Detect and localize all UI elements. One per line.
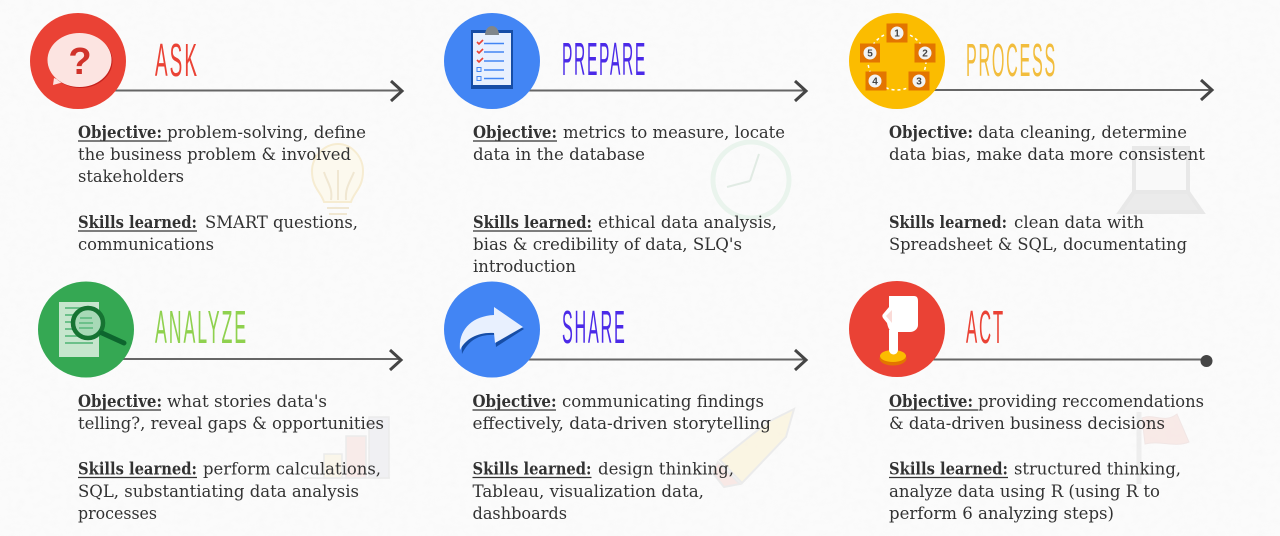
arrow: analyze <box>120 350 401 370</box>
text: process objective: Objective: <box>889 123 973 143</box>
icon: five step cycle <box>849 13 945 109</box>
text: share skills <box>472 460 734 524</box>
text: process skills <box>889 213 1187 255</box>
doodle: bar chart <box>304 417 390 478</box>
text: analyze skills: processes <box>78 504 157 524</box>
text: share objective: communicating findings <box>562 392 764 412</box>
text: act skills: analyze data using R (using R to <box>889 482 1160 502</box>
icon: question speech bubble: ? <box>68 41 92 83</box>
text: analyze objective: what stories data's <box>167 392 327 412</box>
text: ask skills: communications <box>78 235 214 255</box>
panel: analyze: ANALYZE <box>155 301 248 353</box>
arrow: prepare <box>528 81 806 101</box>
text: ask objective: stakeholders <box>78 167 184 187</box>
panel: analyze <box>38 282 401 524</box>
text: ask objective <box>78 123 366 187</box>
text: share skills: Tableau, visualization data, <box>472 482 704 502</box>
text: ask objective: the business problem & involved <box>78 145 351 165</box>
text: share skills: dashboards <box>472 504 567 524</box>
text: process objective: data bias, make data more consistent <box>889 145 1205 165</box>
arrow: act line with end dot <box>930 355 1212 367</box>
text: prepare objective: data in the database <box>473 145 645 165</box>
icon: question speech bubble <box>30 13 126 109</box>
text: analyze skills: SQL, substantiating data analysis <box>78 482 359 502</box>
text: ask skills: SMART questions, <box>205 213 358 233</box>
text: act objective: Objective: <box>889 392 973 412</box>
text: ask objective: Objective: <box>78 123 162 143</box>
arrow: ask <box>112 81 402 101</box>
doodle: light bulb <box>312 144 363 214</box>
text: ask skills <box>78 213 358 255</box>
text: share skills: Skills learned: <box>472 460 592 480</box>
text: prepare skills: Skills learned: <box>473 213 592 233</box>
icon: document with magnifier <box>38 282 134 378</box>
icon: five step cycle: 1 <box>894 28 900 40</box>
panel: share: SHARE <box>562 301 626 353</box>
text: analyze skills: Skills learned: <box>78 460 197 480</box>
text: process objective: data cleaning, determine <box>978 123 1187 143</box>
text: process skills: Spreadsheet & SQL, documentating <box>889 235 1187 255</box>
panel: prepare <box>444 13 806 277</box>
text: act skills <box>889 460 1181 524</box>
text: process objective <box>889 123 1205 165</box>
text: act skills: structured thinking, <box>1014 460 1181 480</box>
arrow: process <box>932 80 1212 100</box>
doodle: clock <box>713 142 789 218</box>
icon: share arrow <box>444 282 540 378</box>
text: prepare skills: bias & credibility of data, SLQ's <box>473 235 742 255</box>
text: share objective <box>472 392 771 434</box>
icon: five step cycle: 3 <box>916 76 922 88</box>
text: analyze objective: Objective: <box>78 392 162 412</box>
text: act objective <box>889 392 1204 434</box>
text: share objective: Objective: <box>472 392 556 412</box>
text: act skills: Skills learned: <box>889 460 1008 480</box>
text: prepare objective: Objective: <box>473 123 557 143</box>
doodle: pencil <box>712 409 794 487</box>
icon: finger pressing button <box>849 281 945 377</box>
doodle: laptop <box>1120 148 1202 212</box>
text: prepare skills: ethical data analysis, <box>598 213 777 233</box>
panel: ask: ASK <box>155 34 199 86</box>
text: prepare skills: introduction <box>473 257 576 277</box>
text: analyze skills: perform calculations, <box>203 460 381 480</box>
icon: clipboard checklist <box>444 13 540 109</box>
text: process skills: clean data with <box>1014 213 1144 233</box>
panel: process: PROCESS <box>966 34 1057 86</box>
text: prepare skills <box>473 213 777 277</box>
panel: share <box>444 282 806 524</box>
text: analyze objective <box>78 392 384 434</box>
icon: five step cycle: 5 <box>867 48 873 60</box>
panel: prepare: PREPARE <box>562 33 647 85</box>
text: ask skills: Skills learned: <box>78 213 197 233</box>
text: ask objective: problem-solving, define <box>167 123 366 143</box>
panel: act <box>849 281 1212 524</box>
doodle: flag <box>1139 412 1189 484</box>
text: share skills: design thinking, <box>598 460 734 480</box>
arrow: share <box>528 350 806 370</box>
text: process skills: Skills learned: <box>889 213 1007 233</box>
text: prepare objective: metrics to measure, locate <box>563 123 785 143</box>
panel: process <box>849 13 1212 255</box>
faint background doodles <box>304 142 1202 487</box>
text: share objective: effectively, data-driven storytelling <box>472 414 771 434</box>
panel: ask <box>30 13 402 255</box>
text: act objective: & data-driven business decisions <box>889 414 1165 434</box>
icon: five step cycle: 4 <box>872 76 878 88</box>
text: act objective: providing reccomendations <box>978 392 1204 412</box>
text: analyze objective: telling?, reveal gaps & opportunities <box>78 414 384 434</box>
text: act skills: perform 6 analyzing steps) <box>889 504 1114 524</box>
panel: act: ACT <box>966 301 1005 353</box>
icon: five step cycle: 2 <box>922 48 928 60</box>
text: analyze skills <box>78 460 381 524</box>
text: prepare objective <box>473 123 785 165</box>
